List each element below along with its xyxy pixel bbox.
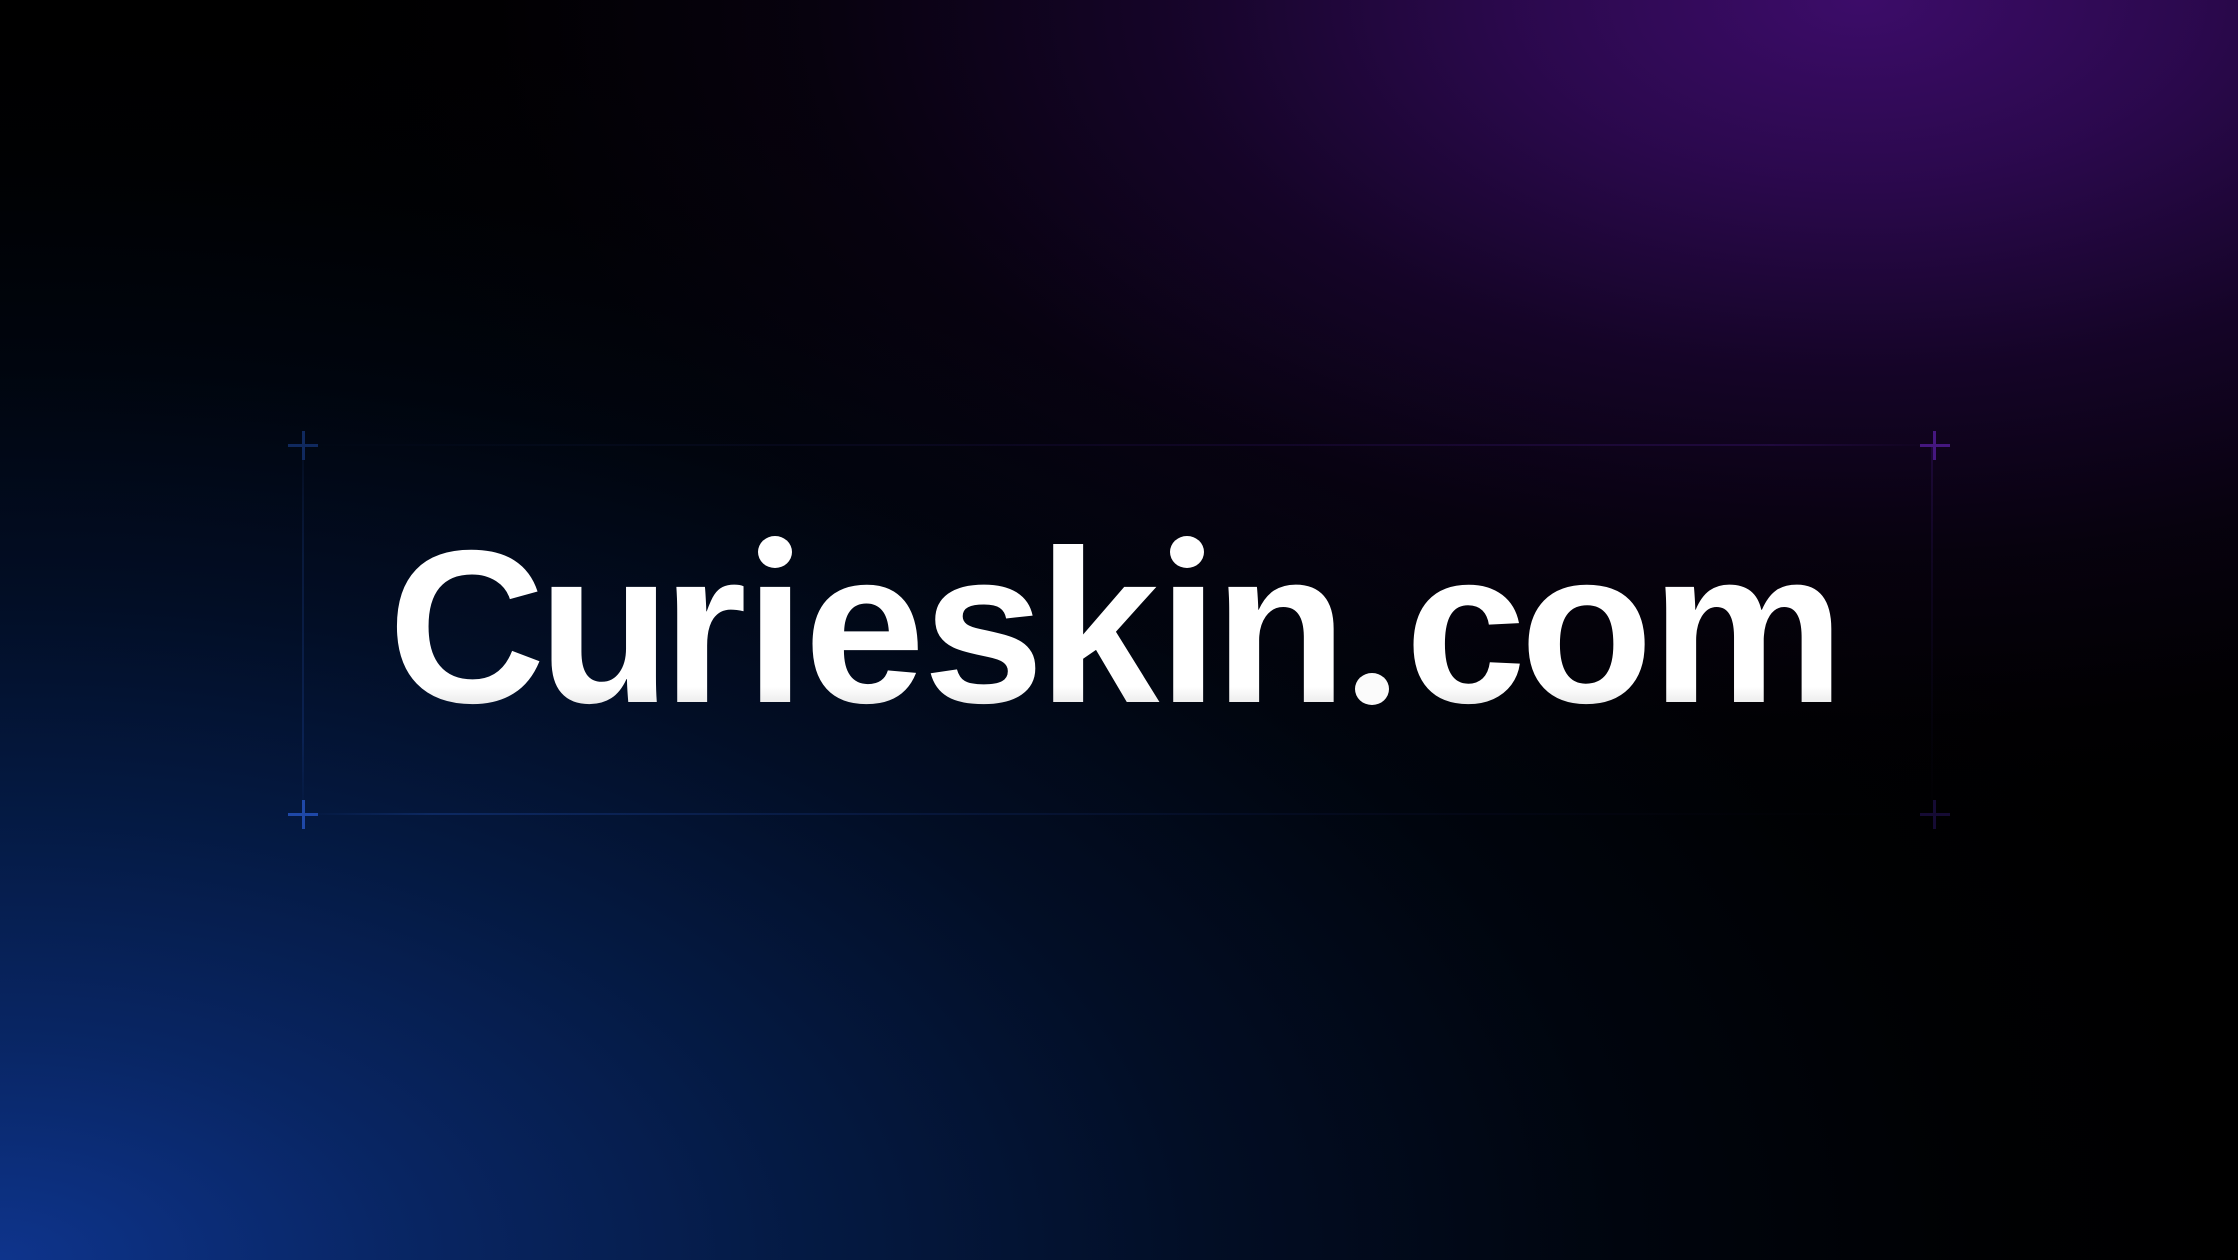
icon: top-left cross [288,431,318,460]
icon: bottom-right cross [1920,800,1950,829]
frame: top line [303,444,1935,446]
frame: bottom line [303,813,1935,815]
icon: bottom-left cross [288,800,318,829]
title: wordmark [396,536,1832,705]
title: wordmark: Curieskin.com [388,506,1845,749]
frame: right line [1931,445,1933,814]
icon: top-right cross [1920,431,1950,460]
frame: left line [302,445,304,814]
